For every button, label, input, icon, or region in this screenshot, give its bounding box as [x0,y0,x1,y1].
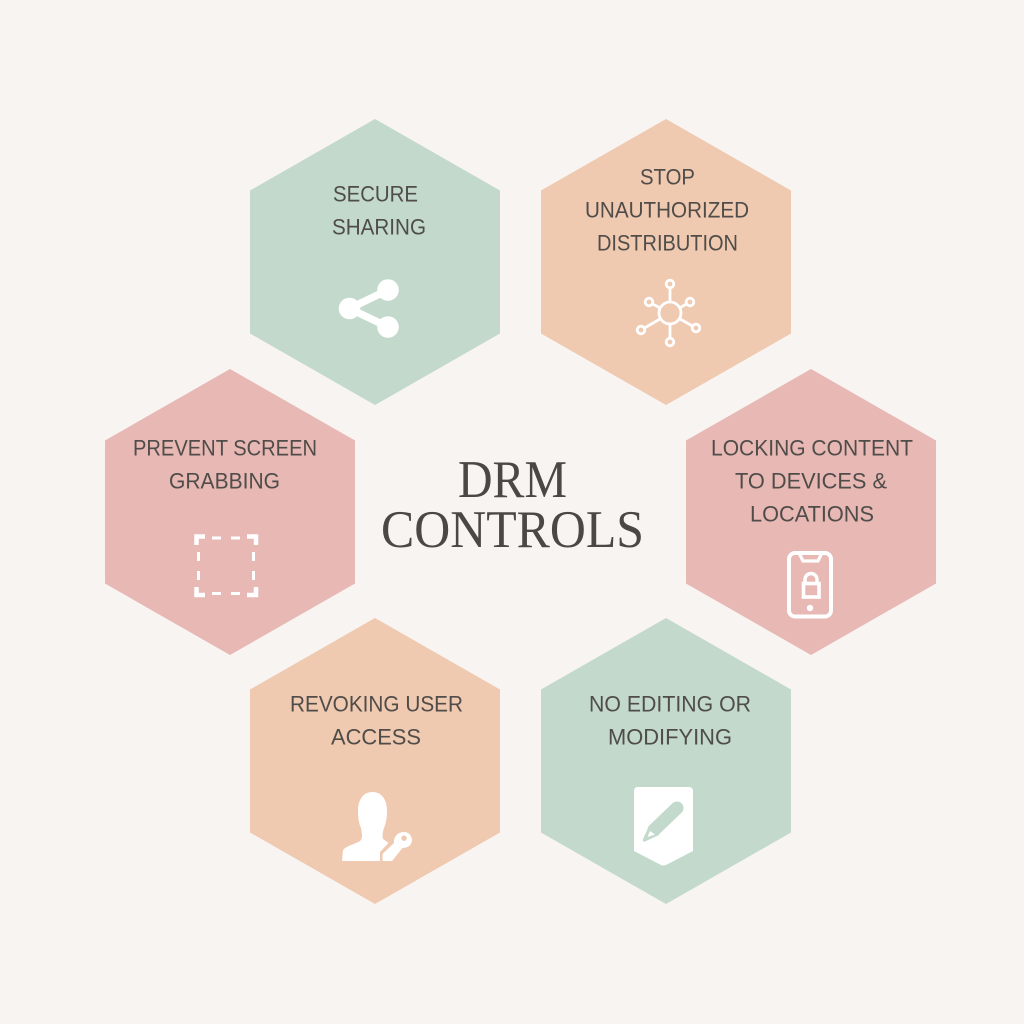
text: revoking user access: REVOKING USER [290,692,463,716]
panel: prevent screen grabbing [105,369,355,655]
text: locking content [711,436,913,526]
icon: phone with lock [789,553,831,616]
text: secure sharing: SHARING [332,214,426,240]
hexagon: no editing or modifying [541,618,791,904]
icon: screen capture frame [196,536,256,595]
text: stop unauthorized distribution [585,164,749,256]
title: DRM [458,451,567,509]
hexagon: stop unauthorized distribution [541,119,791,405]
icon: network [637,280,700,346]
text: prevent screen grabbing: PREVENT SCREEN [133,436,317,460]
text: revoking user access: ACCESS [331,724,421,750]
panel: no editing or modifying [541,618,791,904]
hexagon: prevent screen grabbing [105,369,355,655]
text: no editing or modifying [589,692,751,750]
panel: revoking user access [250,618,500,904]
title [381,451,644,559]
hexagon: revoking user access [250,618,500,904]
text: locking content: LOCKING CONTENT [711,436,913,460]
text: no editing or modifying: MODIFYING [608,724,732,750]
text: prevent screen grabbing: GRABBING [169,468,280,494]
panel: stop unauthorized distribution [541,119,791,405]
text: locking content: TO DEVICES & [735,468,887,494]
icon: user with key [342,792,412,861]
icon: pencil on shield [634,787,693,866]
panel: secure sharing [250,119,500,405]
icon: share [339,279,399,338]
title: CONTROLS [381,501,644,559]
text: stop unauthorized distribution: DISTRIBUTION [597,230,738,256]
panel: locking content [686,369,936,655]
text: no editing or modifying: NO EDITING OR [589,692,751,716]
text: prevent screen grabbing [133,436,317,494]
hexagon: locking content [686,369,936,655]
text: locking content: LOCATIONS [750,502,874,526]
text: secure sharing: SECURE [333,182,418,206]
text: stop unauthorized distribution: UNAUTHORIZED [585,198,749,222]
text: secure sharing [332,182,426,240]
text: revoking user access [290,692,463,750]
text: stop unauthorized distribution: STOP [640,164,695,190]
hexagon: secure sharing [250,119,500,405]
